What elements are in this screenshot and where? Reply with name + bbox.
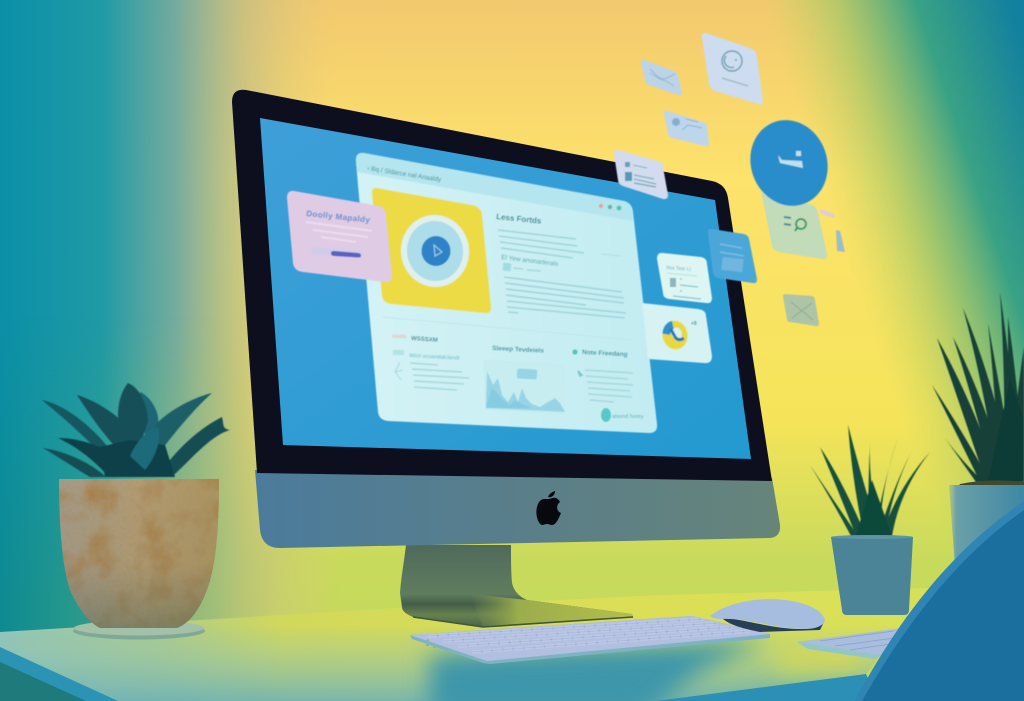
icon: play [434,245,442,256]
main app window on screen: El Yew anonarterals [501,254,559,268]
article copy [498,230,584,258]
soil [958,480,1024,487]
main app window on screen [356,153,657,433]
desk side shadow [0,649,115,701]
second keyboard [797,628,902,659]
column: note [572,349,644,422]
plant: tall spiky in blue pot, right [932,292,1024,580]
chart panel: Sleeep Tevdeiels [492,345,544,355]
donut chart [660,318,690,352]
column: overview: Hosta [392,334,407,340]
plant: spiky in blue pot [810,425,930,615]
floating card: envelope [783,294,819,326]
promo copy [306,222,372,242]
column: note: Note Freedang [582,349,628,358]
monitor [232,90,780,548]
column: overview: Wiiol ocoandalclandt [409,353,460,362]
donut chart card: +9 [691,321,697,327]
play disc [396,211,474,291]
desk front edge [640,674,880,701]
saucer [73,620,205,640]
donut chart card [642,303,712,363]
desk [0,585,940,701]
monitor bezel [232,90,772,481]
desk left edge [0,647,118,701]
succulent leaves [42,383,230,477]
desk surface [0,585,940,701]
chart tooltip [517,368,537,380]
white stats card [657,253,712,303]
chair back [855,502,1024,701]
spiky leaves [810,425,930,536]
floating chip [820,209,845,252]
section divider [383,317,633,340]
pink promo card [287,191,392,282]
window control dots [599,204,621,210]
monitor stand [400,545,633,627]
pot [949,485,1024,580]
floating card: mail wave [641,60,682,95]
keyboard foot [426,639,436,648]
chart panel [484,345,565,414]
floating card: green search [762,190,827,259]
blue pot [831,537,913,615]
keyboard [410,616,770,664]
area chart [486,371,565,412]
logo and wordmark [601,408,611,422]
icon: logo [536,491,561,525]
floating card: list [614,150,668,199]
column: note: alsond horey [612,414,644,420]
floating card: profile [702,33,763,105]
white stats card: Ifea Tear Lt [666,265,692,273]
tall leaves [932,292,1024,482]
screen [260,118,751,459]
column: overview [392,334,469,390]
article heading: Less Fortds [496,212,542,226]
floating card: search [664,111,709,146]
monitor chin [255,470,780,548]
icon: network [395,362,403,380]
column: overview: WSSSXM [411,336,438,344]
plant: succulent in stone pot [42,383,230,640]
video thumbnail [372,188,491,313]
window body [356,153,657,433]
window header strip [356,153,633,221]
promo heading: Doolly Mapaldy [306,209,371,225]
keys [428,619,750,652]
breadcrumb: ‹ Bq / Sldarce nal Anaaldy [367,165,442,184]
stone pot [59,479,219,628]
floating card: blue layout [708,229,757,283]
floating UI cards [614,33,845,326]
mouse [710,599,825,632]
promo button [311,247,363,258]
floating disc [738,109,840,217]
